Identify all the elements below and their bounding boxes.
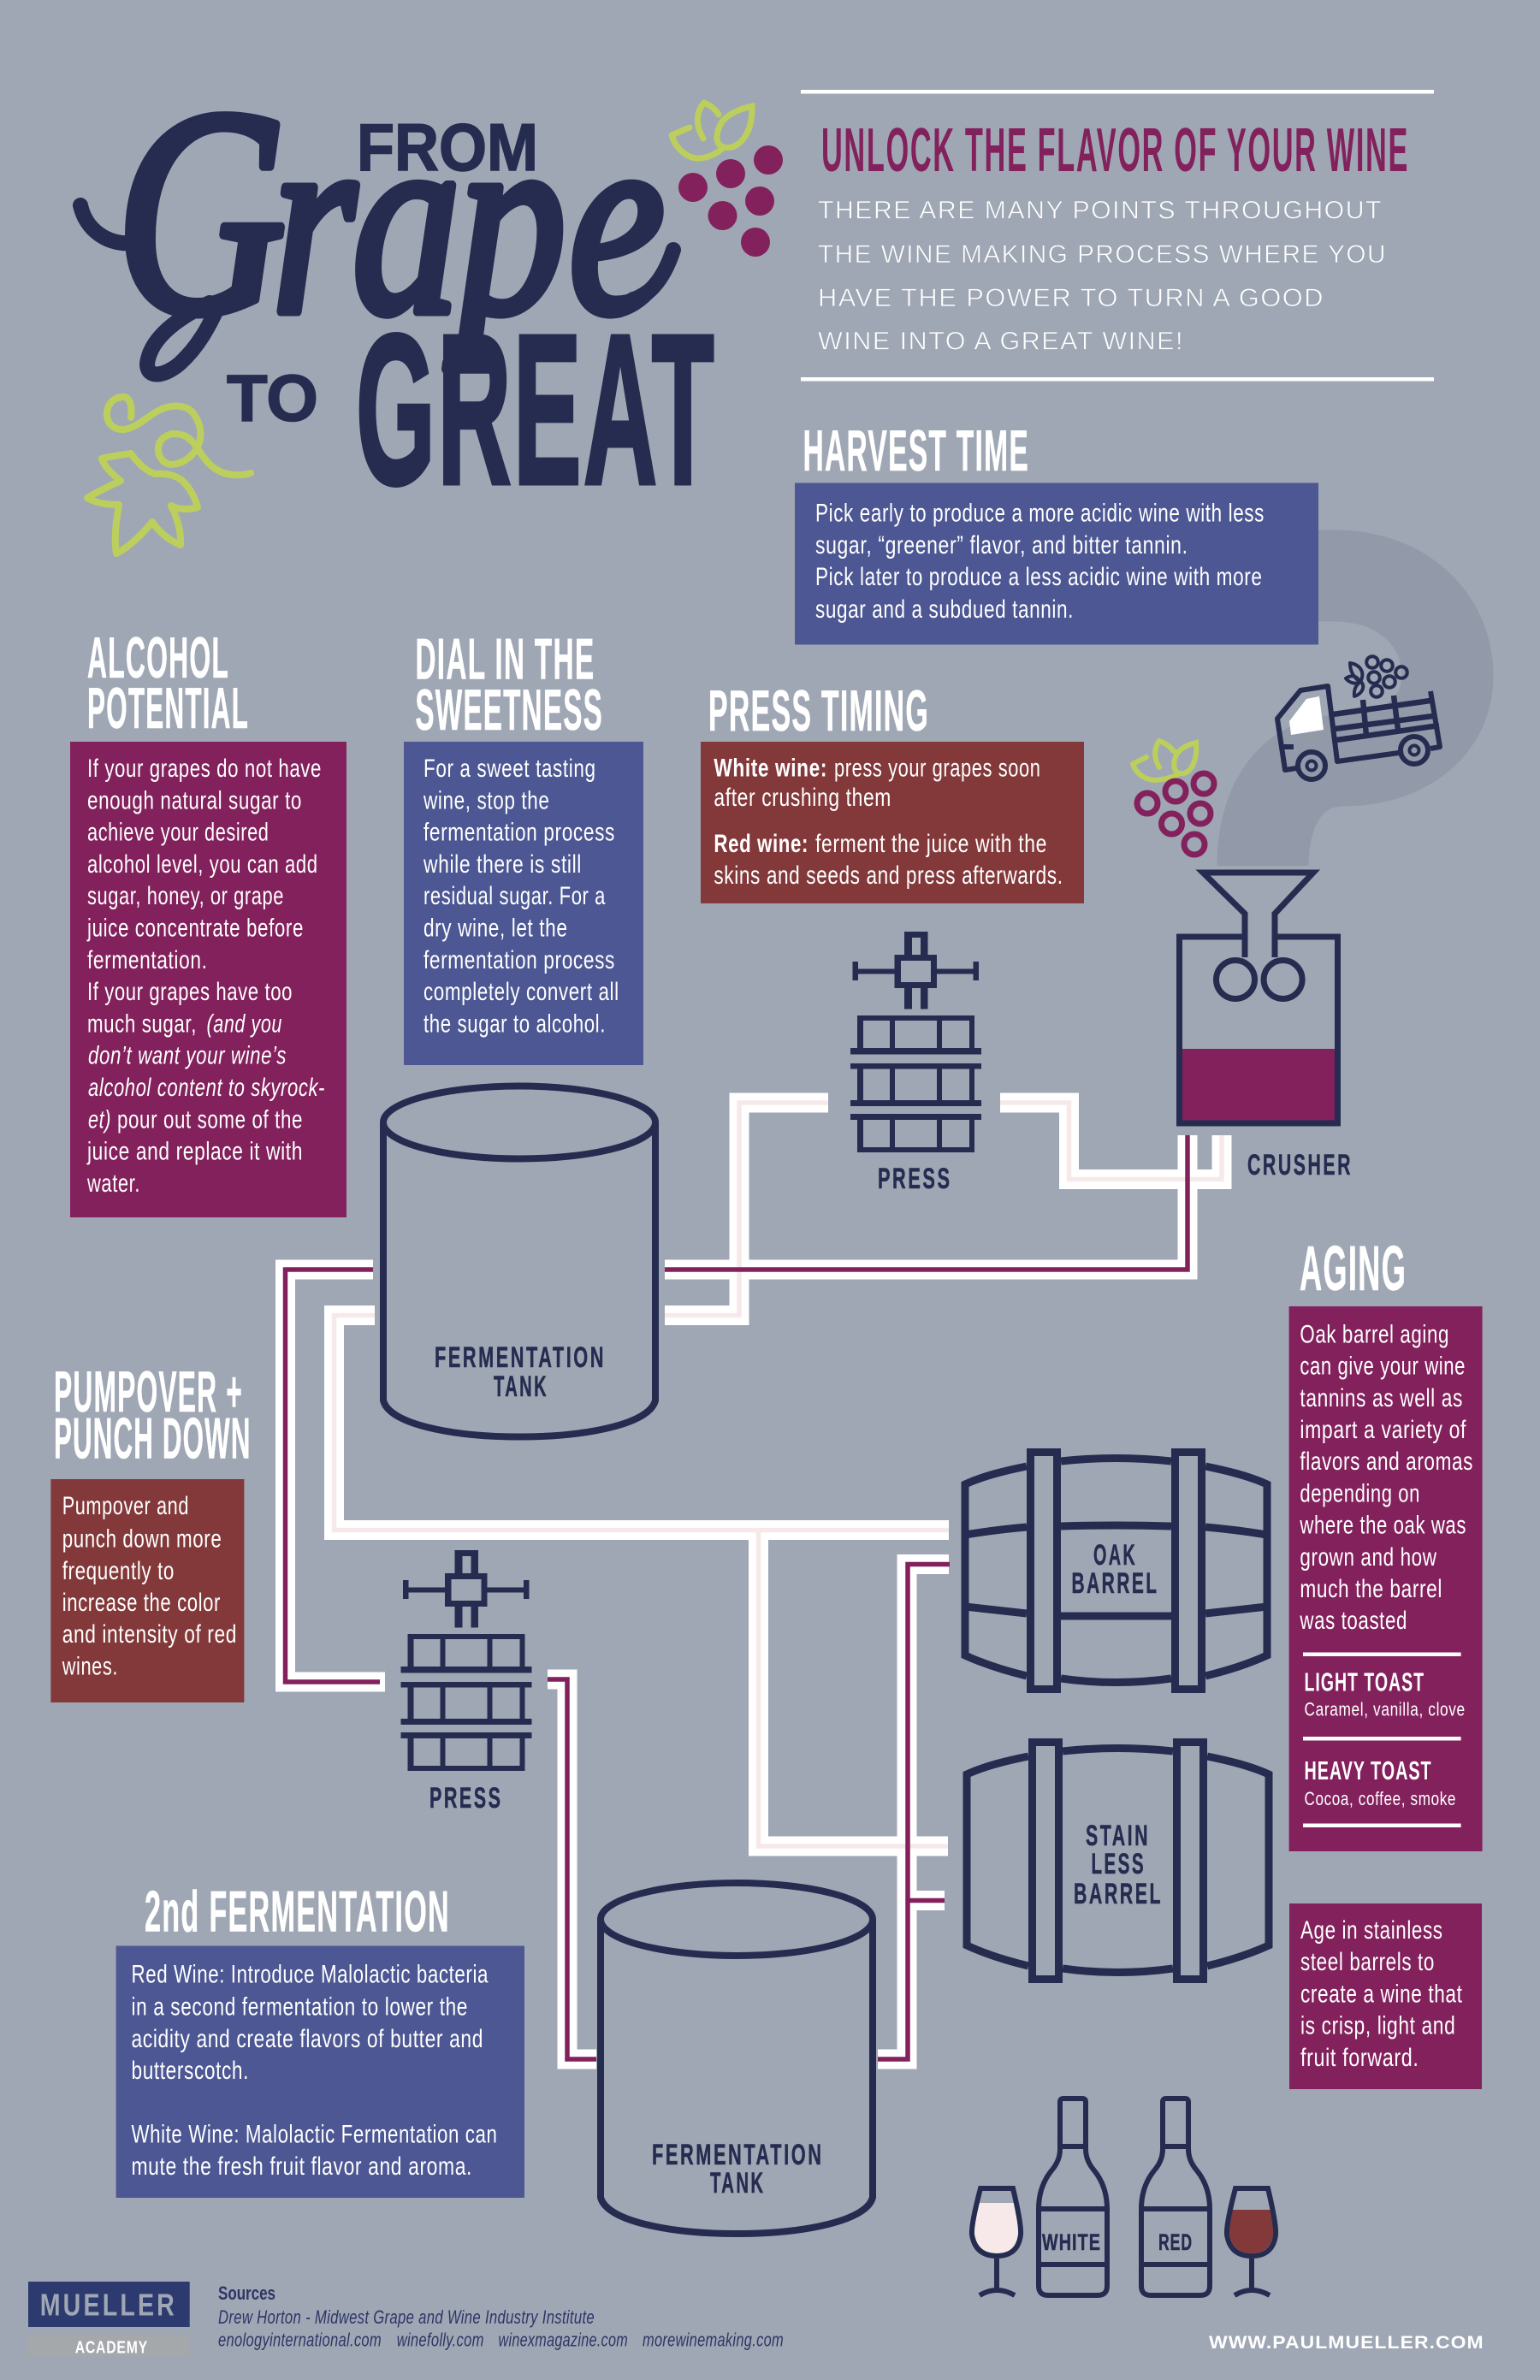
- panel: 2nd fermentation: acidity and create flavors of butter and: [132, 2025, 483, 2053]
- title: From Grape to Great: [80, 49, 716, 529]
- panel: alcohol potential: water.: [86, 1169, 140, 1198]
- panel: alcohol potential: fermentation.: [87, 946, 207, 974]
- panel: 2nd fermentation: butterscotch.: [132, 2057, 249, 2085]
- text: PUNCH DOWN: [54, 1406, 252, 1471]
- panel: dial in the sweetness: completely convert all: [424, 978, 619, 1006]
- panel: pumpover and punch down: [50, 1359, 252, 1702]
- label: fermentation tank: [435, 1341, 606, 1403]
- panel: press timing: press your grapes soon: [834, 755, 1040, 782]
- panel: dial in the sweetness: residual sugar. For a: [424, 882, 606, 910]
- title: From Grape to Great: rape: [272, 70, 665, 370]
- panel: press timing: skins and seeds and press afterwards.: [714, 861, 1063, 890]
- panel: aging: can give your wine: [1300, 1353, 1466, 1381]
- panel: alcohol potential: achieve your desired: [87, 819, 269, 847]
- icon: white wine glass: [972, 2188, 1021, 2295]
- panel: pumpover and punch down: increase the color: [62, 1589, 221, 1617]
- intro block: unlock the flavor: HAVE THE POWER TO TURN A GOOD: [818, 284, 1324, 312]
- label: stainless barrel: LESS: [1092, 1848, 1146, 1880]
- panel: aging: [1289, 1233, 1483, 1851]
- panel: alcohol potential: juice and replace it with: [86, 1138, 303, 1166]
- panel: dial in the sweetness: the sugar to alcohol.: [424, 1009, 606, 1038]
- panel: aging: was toasted: [1300, 1607, 1407, 1635]
- intro block: unlock the flavor: WINE INTO A GREAT WINE!: [818, 328, 1184, 356]
- panel: dial in the sweetness: fermentation process: [424, 819, 615, 847]
- icon: second press: [400, 1550, 532, 1771]
- panel: harvest time: HARVEST TIME: [803, 418, 1029, 483]
- panel: 2nd fermentation: Red Wine: Introduce Malolactic bacteria: [132, 1961, 489, 1989]
- panel: harvest time: Pick early to produce a more acidic wine with less: [815, 500, 1265, 527]
- icon: red wine glass: [1227, 2188, 1276, 2295]
- icon: white wine bottle: [1039, 2099, 1107, 2295]
- icon: grape bunch above crusher: [1133, 741, 1214, 855]
- panel: stainless steel aging: steel barrels to: [1300, 1948, 1435, 1976]
- panel: aging: HEAVY TOAST: [1304, 1755, 1432, 1785]
- panel: aging: grown and how: [1300, 1543, 1437, 1572]
- sources: [218, 2282, 784, 2351]
- label: second fermentation tank: [652, 2139, 823, 2199]
- title: From Grape to Great: G: [116, 49, 287, 376]
- text: PUMPOVER +: [54, 1359, 243, 1424]
- website url: WWW.PAULMUELLER.COM: [1209, 2332, 1484, 2353]
- logo: Mueller Academy: ACADEMY: [75, 2339, 148, 2358]
- panel: aging: where the oak was: [1300, 1512, 1466, 1540]
- panel: alcohol potential: much sugar,: [87, 1009, 197, 1038]
- label: oak barrel: OAK: [1093, 1539, 1137, 1572]
- title: From Grape to Great: FROM: [357, 110, 538, 185]
- intro block: unlock the flavor: THE WINE MAKING PROCESS WHERE YOU: [818, 240, 1387, 269]
- panel: alcohol potential: alcohol level, you can add: [87, 850, 318, 879]
- icon: white wine bottle: WHITE: [1042, 2229, 1101, 2255]
- panel: pumpover and punch down: punch down more: [62, 1525, 222, 1554]
- panel: aging: tannins as well as: [1300, 1384, 1463, 1412]
- panel: press timing: after crushing them: [714, 784, 891, 812]
- panel: press timing: White wine:: [714, 755, 827, 782]
- panel: aging: flavors and aromas: [1300, 1448, 1473, 1476]
- icon: vine leaf and tendril: [87, 397, 251, 554]
- panel: alcohol potential: alcohol content to skyrock-: [88, 1074, 325, 1102]
- panel: alcohol potential: don’t want your wine’s: [88, 1042, 287, 1070]
- panel: dial in the sweetness: SWEETNESS: [415, 678, 603, 743]
- label: stainless barrel: STAIN: [1086, 1820, 1150, 1852]
- icon: second fermentation tank: [601, 1883, 873, 2234]
- panel: stainless steel aging: is crisp, light and: [1300, 2012, 1455, 2040]
- panel: dial in the sweetness: while there is still: [423, 850, 582, 879]
- panel: dial in the sweetness: wine, stop the: [423, 786, 549, 814]
- panel: pumpover and punch down: and intensity of red: [62, 1620, 237, 1649]
- panel: 2nd fermentation: in a second fermentation to lower the: [132, 1993, 468, 2022]
- panel: press timing: PRESS TIMING: [708, 678, 929, 743]
- label: oak barrel: BARREL: [1071, 1567, 1158, 1600]
- panel: pumpover and punch down: Pumpover and: [62, 1492, 189, 1520]
- panel: alcohol potential: If your grapes have too: [87, 978, 293, 1006]
- sources: winexmagazine.com: [498, 2329, 628, 2351]
- sources: Sources: [218, 2282, 275, 2304]
- label: fermentation tank: TANK: [494, 1371, 548, 1403]
- panel: alcohol potential: POTENTIAL: [87, 676, 249, 741]
- panel: alcohol potential: If your grapes do not have: [87, 755, 322, 783]
- icon: crusher: [1179, 873, 1338, 1123]
- panel: dial in the sweetness: dry wine, let the: [424, 914, 568, 943]
- intro block: unlock the flavor: THERE ARE MANY POINTS THROUGHOUT: [818, 197, 1383, 225]
- panel: press timing: [701, 678, 1084, 903]
- label: stainless barrel: BARREL: [1074, 1878, 1163, 1910]
- label: press: PRESS: [878, 1163, 951, 1195]
- panel: alcohol potential: juice concentrate before: [86, 914, 304, 943]
- label: second fermentation tank: TANK: [710, 2167, 765, 2199]
- panel: 2nd fermentation: White Wine: Malolactic Fermentation can: [132, 2121, 498, 2149]
- panel: dial in the sweetness: DIAL IN THE: [415, 626, 595, 691]
- label: second press: PRESS: [429, 1782, 503, 1815]
- sources: morewinemaking.com: [643, 2329, 784, 2351]
- text: GREAT: [356, 290, 716, 529]
- panel: harvest time: sugar, “greener” flavor, and bitter tannin.: [815, 531, 1188, 559]
- panel: press timing: Red wine:: [714, 830, 808, 858]
- label: stainless barrel: [1074, 1820, 1163, 1910]
- panel: alcohol potential: sugar, honey, or grape: [87, 882, 284, 910]
- panel: alcohol potential: enough natural sugar to: [87, 786, 302, 814]
- icon: red wine bottle: RED: [1158, 2229, 1193, 2255]
- panel: press timing: ferment the juice with the: [815, 830, 1047, 858]
- panel: alcohol potential: pour out some of the: [117, 1105, 303, 1134]
- sources: winefolly.com: [397, 2329, 484, 2351]
- panel: aging: depending on: [1300, 1479, 1420, 1507]
- panel: stainless steel aging: Age in stainless: [1300, 1916, 1443, 1945]
- panel: dial in the sweetness: fermentation process: [424, 946, 615, 974]
- label: crusher: CRUSHER: [1247, 1149, 1353, 1181]
- icon: stainless barrel: [967, 1742, 1269, 1980]
- panel: aging: Caramel, vanilla, clove: [1304, 1699, 1466, 1720]
- panel: alcohol potential: ALCOHOL: [87, 625, 229, 690]
- icon: oak barrel: [965, 1453, 1267, 1689]
- panel: alcohol potential: et): [88, 1105, 111, 1134]
- panel: harvest time: [795, 418, 1318, 645]
- panel: stainless steel aging: fruit forward.: [1300, 2044, 1419, 2072]
- label: oak barrel: [1071, 1539, 1158, 1600]
- panel: dial in the sweetness: For a sweet tasting: [424, 755, 596, 783]
- panel: aging: AGING: [1300, 1233, 1407, 1304]
- label: fermentation tank: FERMENTATION: [435, 1341, 606, 1374]
- panel: 2nd fermentation: mute the fresh fruit flavor and aroma.: [132, 2152, 472, 2181]
- panel: aging: LIGHT TOAST: [1304, 1667, 1424, 1697]
- decorative swoosh: harvest route question mark: [1263, 576, 1448, 866]
- panel: stainless steel aging: create a wine that: [1300, 1980, 1463, 2009]
- panel: aging: much the barrel: [1300, 1575, 1442, 1603]
- panel: stainless steel aging: [1289, 1903, 1482, 2089]
- sources: enologyinternational.com: [218, 2329, 382, 2351]
- logo: Mueller Academy: MUELLER: [40, 2288, 177, 2323]
- panel: harvest time: Pick later to produce a less acidic wine with more: [815, 563, 1263, 591]
- intro block: unlock the flavor: [801, 90, 1434, 382]
- logo: Mueller Academy: [28, 2282, 190, 2358]
- panel: pumpover and punch down: wines.: [62, 1653, 118, 1681]
- sources: Drew Horton - Midwest Grape and Wine Industry Institute: [218, 2306, 595, 2328]
- panel: dial in the sweetness: [404, 626, 643, 1065]
- icon: red wine bottle: [1141, 2099, 1210, 2295]
- panel: harvest time: sugar and a subdued tannin.: [815, 595, 1074, 624]
- panel: aging: Cocoa, coffee, smoke: [1304, 1788, 1456, 1809]
- panel: alcohol potential: (and you: [207, 1009, 282, 1038]
- panel: 2nd fermentation: 2nd FERMENTATION: [145, 1880, 450, 1945]
- panel: aging: impart a variety of: [1300, 1416, 1466, 1444]
- title: From Grape to Great: TO: [227, 362, 318, 435]
- label: second fermentation tank: FERMENTATION: [652, 2139, 823, 2171]
- panel: alcohol potential: [70, 625, 346, 1217]
- icon: grape cluster with leaf, top: [672, 103, 783, 257]
- icon: fermentation tank: [383, 1086, 655, 1437]
- pipes: transfer lines between equipment: [286, 1103, 1222, 2059]
- panel: 2nd fermentation: [116, 1880, 524, 2198]
- icon: delivery truck with grapes: [1277, 656, 1440, 779]
- icon: press: [850, 932, 981, 1152]
- panel: pumpover and punch down: frequently to: [62, 1557, 175, 1585]
- panel: aging: Oak barrel aging: [1300, 1320, 1449, 1348]
